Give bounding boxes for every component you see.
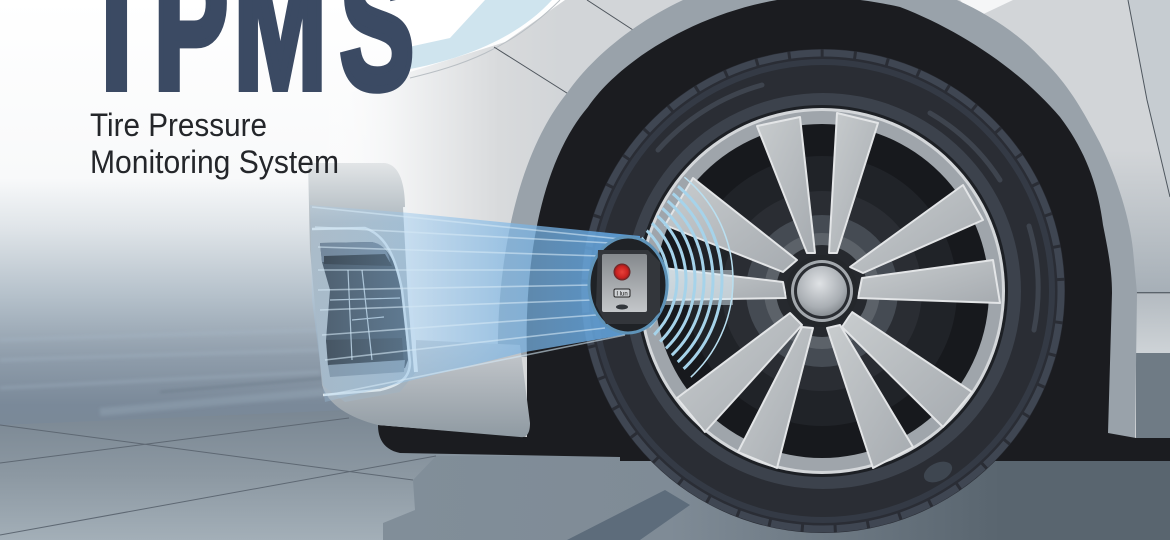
floor [0,410,1170,540]
sensor label: I lun [616,292,628,298]
grille [312,228,410,395]
valve mark [921,458,955,486]
hub [786,255,858,327]
sensor port [616,304,628,310]
signal beam [310,205,640,402]
sidewall marks [658,85,1038,330]
windshield [405,0,552,70]
wheel [581,49,1065,533]
tire [581,49,1065,533]
spokes [663,113,1000,468]
subtitle: Tire Pressure [90,107,267,143]
subtitle [90,107,339,180]
car body [300,0,1170,438]
speed streaks [0,330,325,412]
sonic wave arcs [641,176,734,378]
sensor device [602,254,647,312]
lower bumper [322,340,530,437]
bumper panel [308,163,416,402]
red indicator [614,264,630,280]
wheel well [378,0,1170,461]
bumper edge highlight [405,207,416,372]
subtitle: Monitoring System [90,144,339,180]
fender arch band [498,0,1137,438]
right door panel [960,0,1170,438]
TPMS sensor [589,237,667,333]
rim lip [636,105,1008,477]
rim barrel [655,124,989,458]
body crease lines [410,0,656,107]
